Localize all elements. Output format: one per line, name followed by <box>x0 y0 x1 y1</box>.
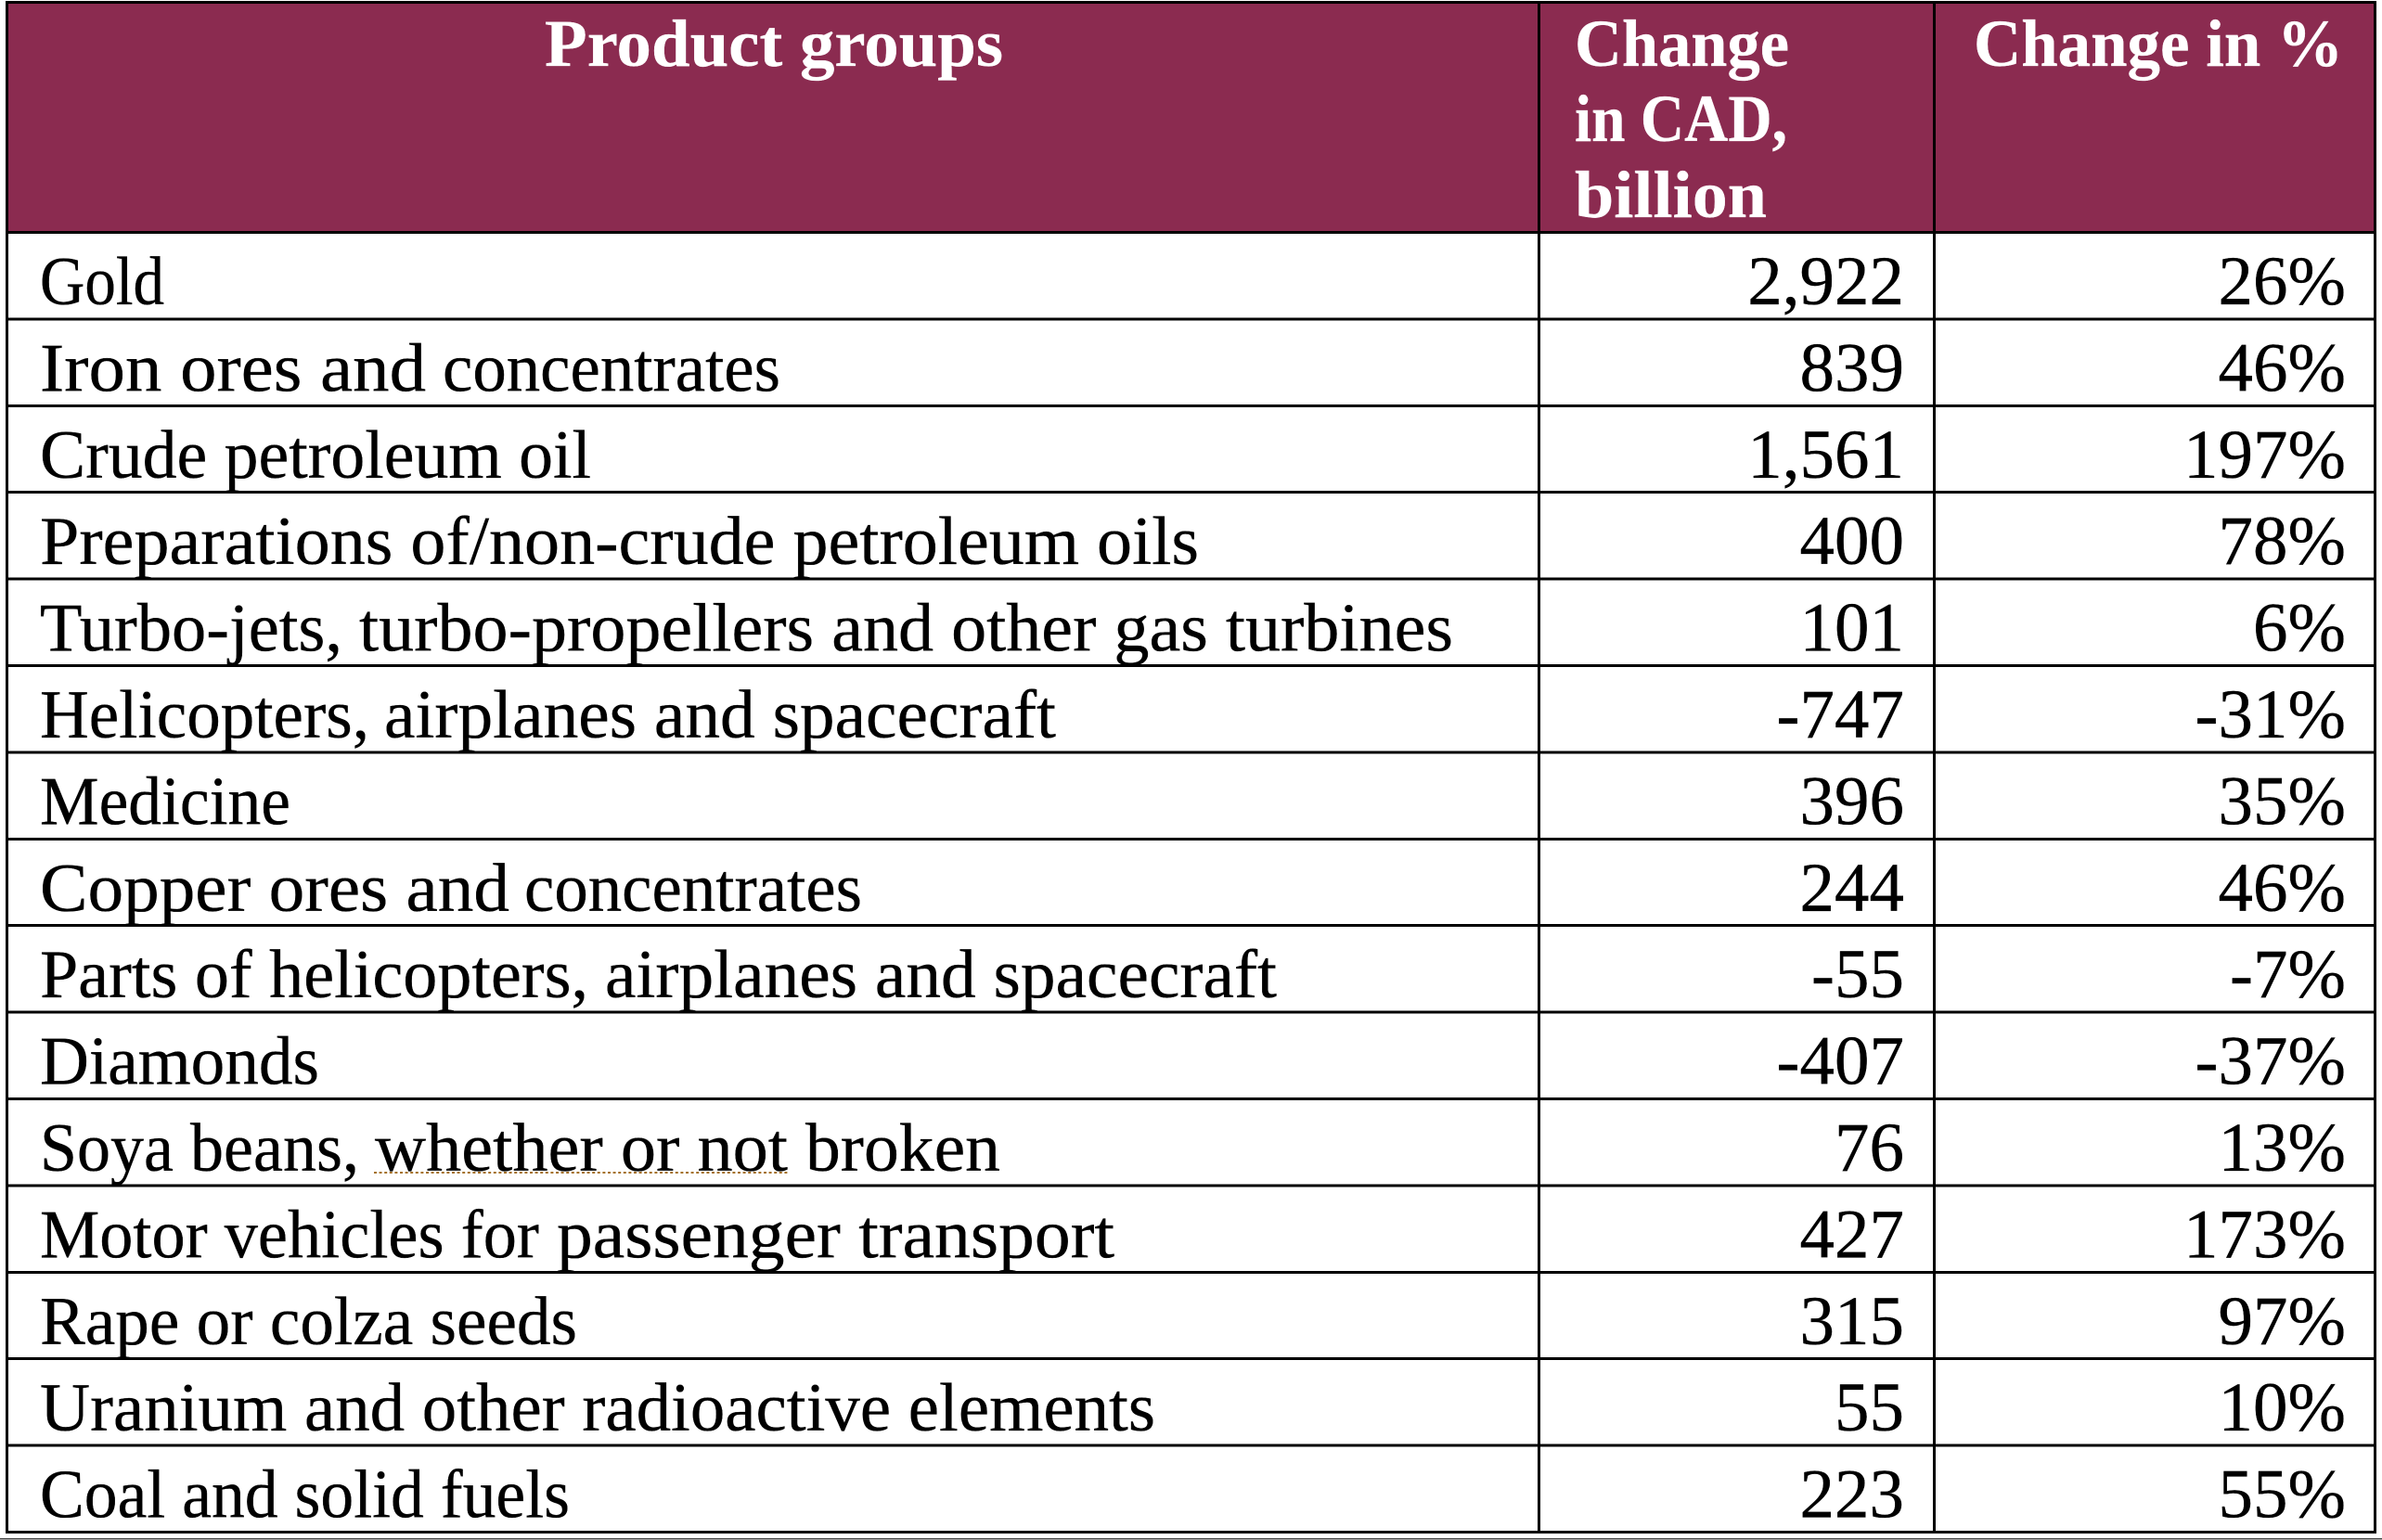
row: Gold: 2,922 <box>1747 243 1904 320</box>
row: Copper ores and concentrates: concentrates <box>524 851 862 927</box>
row: Iron ores and concentrates: Iron ores and <box>40 330 426 406</box>
row: Coal and solid fuels: 223 <box>1800 1457 1904 1534</box>
row: Soya beans, whether or not broken <box>8 1100 2374 1187</box>
row: Copper ores and concentrates: 46% <box>2219 850 2346 927</box>
row: Medicine: 35% <box>2219 763 2346 840</box>
row: Diamonds: Diamonds <box>40 1024 319 1100</box>
row: Preparations of/non-crude petroleum oils <box>8 494 2374 580</box>
row: Parts of helicopters, airplanes and spacecraft <box>8 927 2374 1013</box>
header: Change in CAD, billion: Change <box>1575 6 1789 81</box>
row: Helicopters, airplanes and spacecraft <box>8 667 2374 753</box>
row: Turbo-jets, turbo-propellers and other gas turbines: 101 <box>1800 590 1904 667</box>
row: Motor vehicles for passenger transport: passenger transport <box>557 1197 1114 1273</box>
row: Parts of helicopters, airplanes and spacecraft: airplanes and spacecraft <box>605 937 1277 1013</box>
row: Diamonds: -407 <box>1777 1023 1904 1100</box>
row: Medicine: Medicine <box>40 764 290 840</box>
row: Uranium and other radioactive elements <box>8 1360 2374 1446</box>
row: Motor vehicles for passenger transport: 427 <box>1800 1196 1904 1273</box>
row: Iron ores and concentrates: 839 <box>1800 329 1904 406</box>
row: Coal and solid fuels: Coal and solid fuels <box>40 1457 570 1534</box>
row: Iron ores and concentrates <box>8 320 2374 406</box>
row: Soya beans, whether or not broken: whether or not <box>375 1110 788 1187</box>
header: Product groups: Product groups <box>545 6 1003 81</box>
row: Rape or colza seeds: 97% <box>2219 1283 2346 1360</box>
row: Soya beans, whether or not broken: 76 <box>1835 1110 1904 1187</box>
row: Preparations of/non-crude petroleum oils: 78% <box>2219 503 2346 580</box>
row: Uranium and other radioactive elements: Uranium and other radioactive elements <box>40 1370 1155 1446</box>
row: Iron ores and concentrates: 46% <box>2219 329 2346 406</box>
header: Change in CAD, billion: in CAD, <box>1575 82 1787 156</box>
row: Soya beans, whether or not broken: 13% <box>2219 1110 2346 1187</box>
row: Turbo-jets, turbo-propellers and other gas turbines <box>8 581 2374 667</box>
row: Soya beans, whether or not broken: broken <box>805 1110 1000 1187</box>
row: Coal and solid fuels: 55% <box>2219 1457 2346 1534</box>
row: Helicopters, airplanes and spacecraft: -747 <box>1777 676 1904 753</box>
row: Motor vehicles for passenger transport: Motor vehicles for <box>40 1197 539 1273</box>
row: Turbo-jets, turbo-propellers and other gas turbines: turbo-propellers and other gas turbines <box>359 591 1453 667</box>
row: Diamonds: -37% <box>2195 1023 2346 1100</box>
header: Change in CAD, billion <box>1575 6 1789 232</box>
row: Helicopters, airplanes and spacecraft: airplanes and spacecraft <box>384 677 1056 753</box>
table header row <box>6 1 2376 234</box>
row: Turbo-jets, turbo-propellers and other gas turbines: Turbo-jets, <box>40 591 342 667</box>
row: Gold: Gold <box>40 244 164 320</box>
row: Crude petroleum oil: Crude petroleum oil <box>40 417 591 494</box>
row: Parts of helicopters, airplanes and spacecraft: -7% <box>2230 936 2346 1013</box>
header: Change in %: Change in % <box>1974 6 2343 81</box>
row: Helicopters, airplanes and spacecraft: -31% <box>2195 676 2346 753</box>
row: Preparations of/non-crude petroleum oils: 400 <box>1800 503 1904 580</box>
row: Parts of helicopters, airplanes and spacecraft: -55 <box>1811 936 1904 1013</box>
row: Motor vehicles for passenger transport <box>8 1187 2374 1273</box>
row: Preparations of/non-crude petroleum oils: Preparations of/non-crude petroleum oils <box>40 504 1199 580</box>
row: Crude petroleum oil: 1,561 <box>1747 417 1904 494</box>
row: Helicopters, airplanes and spacecraft: Helicopters, <box>40 677 369 753</box>
row: Diamonds <box>8 1014 2374 1100</box>
row: Rape or colza seeds: Rape or colza seeds <box>40 1284 577 1360</box>
row: Gold <box>8 234 2374 320</box>
row: Gold: 26% <box>2219 243 2346 320</box>
row: Rape or colza seeds <box>8 1274 2374 1360</box>
row: Crude petroleum oil <box>8 407 2374 494</box>
row: Coal and solid fuels <box>8 1447 2374 1534</box>
row: Motor vehicles for passenger transport: 173% <box>2183 1196 2346 1273</box>
row: Copper ores and concentrates <box>8 841 2374 927</box>
row: Uranium and other radioactive elements: 55 <box>1835 1369 1904 1446</box>
row: Copper ores and concentrates: Copper ores and <box>40 851 509 927</box>
row: Uranium and other radioactive elements: 10% <box>2219 1369 2346 1446</box>
header: Change in CAD, billion: billion <box>1575 158 1767 232</box>
row: Turbo-jets, turbo-propellers and other gas turbines: 6% <box>2253 590 2346 667</box>
row: Medicine: 396 <box>1800 763 1904 840</box>
row: Soya beans, whether or not broken: Soya beans, <box>40 1110 359 1187</box>
row: Rape or colza seeds: 315 <box>1800 1283 1904 1360</box>
row: Medicine <box>8 753 2374 840</box>
row: Copper ores and concentrates: 244 <box>1800 850 1904 927</box>
row: Crude petroleum oil: 197% <box>2183 417 2346 494</box>
row: Parts of helicopters, airplanes and spacecraft: Parts of helicopters, <box>40 937 588 1013</box>
row: Iron ores and concentrates: concentrates <box>443 330 780 406</box>
